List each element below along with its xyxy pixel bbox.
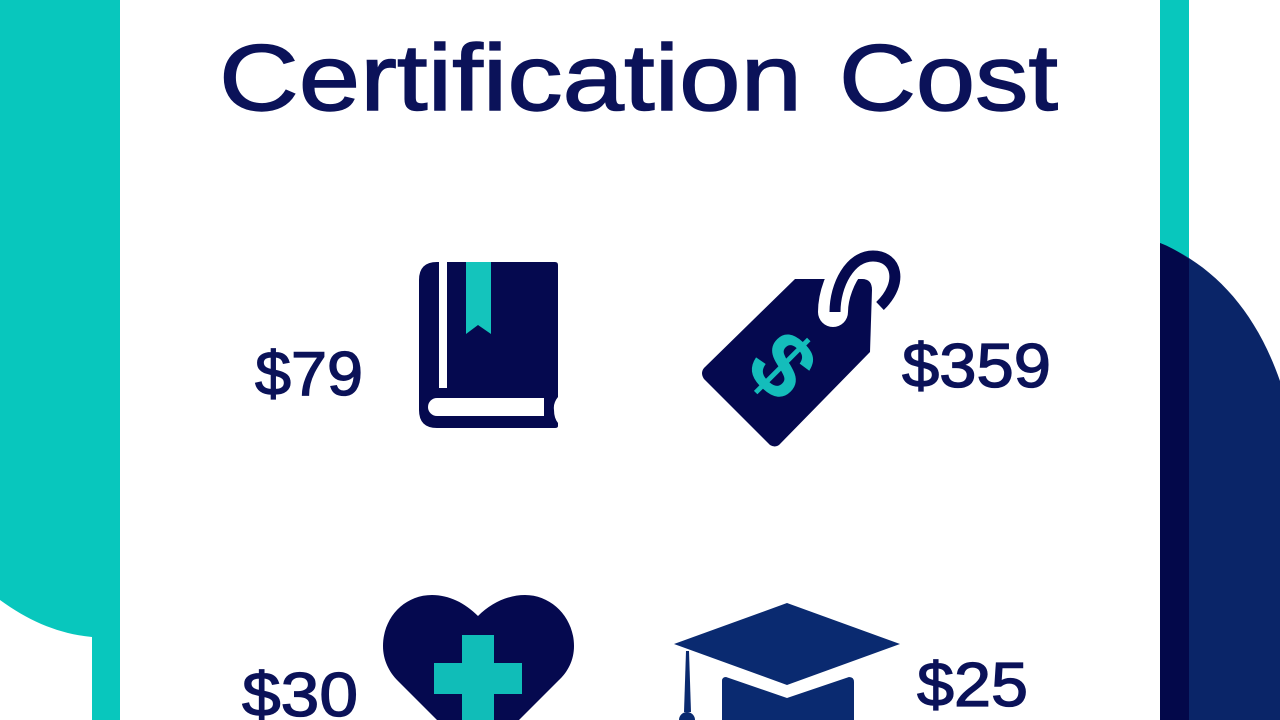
item: education cost	[674, 603, 1028, 720]
value: $25: $25	[917, 651, 1028, 720]
icon: graduation cap	[674, 603, 900, 720]
title	[219, 25, 1058, 130]
item: book cost	[255, 262, 558, 428]
title: Cost	[839, 25, 1058, 130]
right navy quarter circle	[1160, 243, 1280, 720]
title: Certification	[219, 25, 802, 130]
value: $79: $79	[255, 340, 363, 409]
right teal strip	[1160, 0, 1189, 262]
value: $359: $359	[902, 332, 1051, 401]
left teal decorative shape	[0, 0, 120, 720]
icon: price tag with dollar sign	[702, 256, 895, 446]
item: price tag cost	[702, 256, 1051, 446]
icon: price tag with dollar sign: $	[728, 312, 836, 420]
icon: heart with medical cross	[383, 595, 574, 720]
item: health cost	[242, 595, 574, 720]
icon: book with bookmark	[419, 262, 558, 428]
